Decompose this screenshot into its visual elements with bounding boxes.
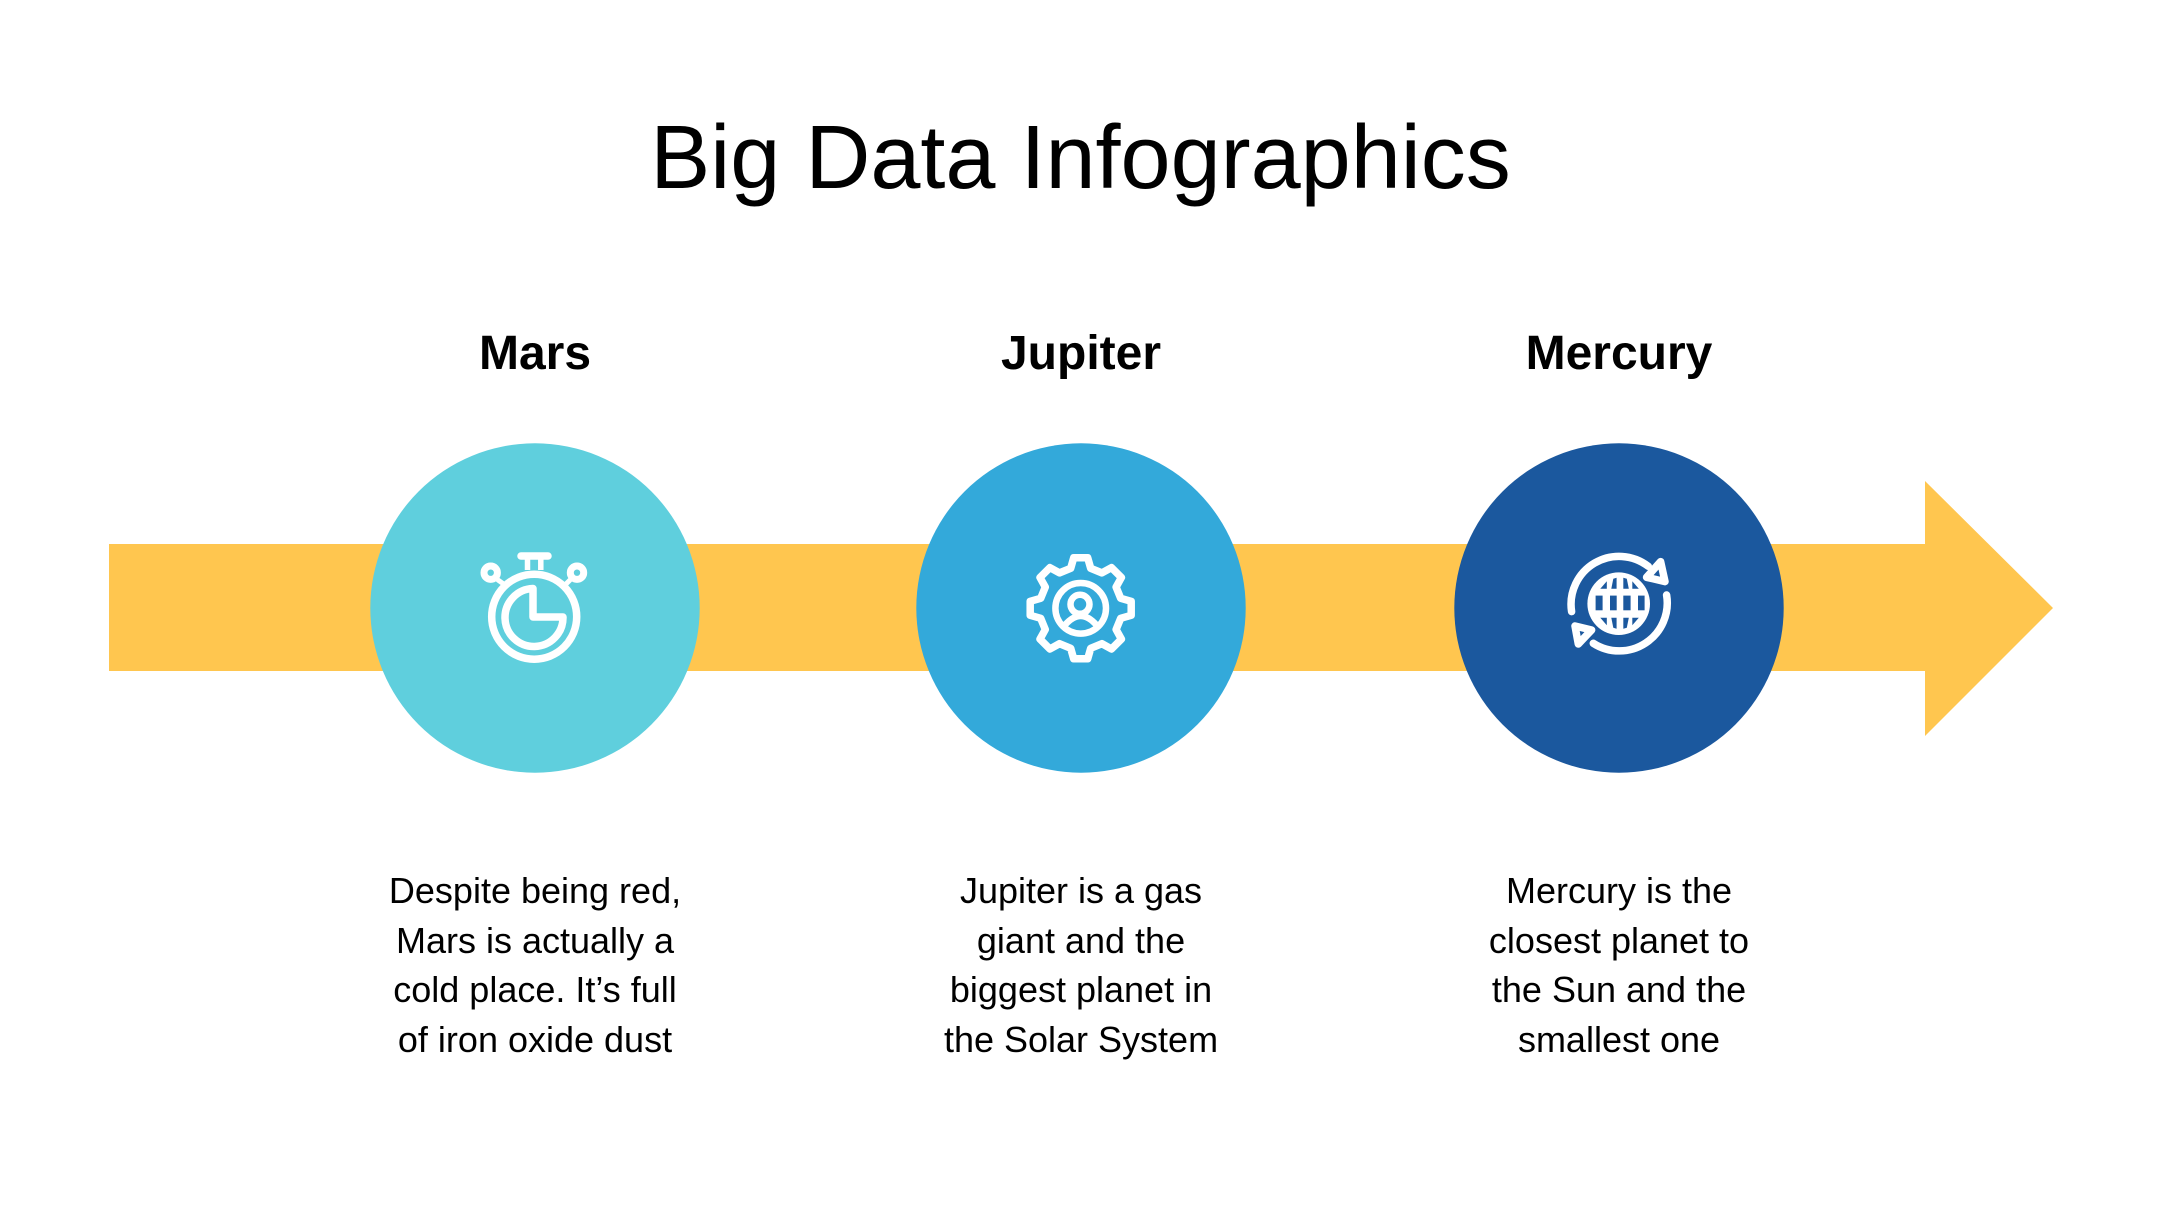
icon: stopwatch xyxy=(484,556,584,659)
text: Mars description: cold place. It’s full xyxy=(393,969,677,1010)
icon: gear with person xyxy=(1030,558,1131,659)
text: Mars description xyxy=(389,870,681,1060)
text: Jupiter description: biggest planet in xyxy=(950,969,1212,1010)
heading: Mars: Mars xyxy=(479,327,591,380)
circle: Jupiter xyxy=(916,443,1246,773)
text: Jupiter description: Jupiter is a gas xyxy=(960,870,1202,911)
heading: Mercury: Mercury xyxy=(1526,327,1712,380)
text: Mars description: of iron oxide dust xyxy=(398,1019,672,1060)
text: Mercury description: smallest one xyxy=(1518,1019,1720,1060)
text: Jupiter description: giant and the xyxy=(977,920,1185,961)
text: Mercury description: Mercury is the xyxy=(1506,870,1732,911)
text: Mars description: Mars is actually a xyxy=(396,920,674,961)
text: Mercury description: closest planet to xyxy=(1489,920,1749,961)
icon: globe with rotating arrows xyxy=(1571,556,1667,651)
title: Big Data Infographics xyxy=(650,108,1511,208)
circle: Mars xyxy=(370,443,700,773)
circle: Mercury xyxy=(1454,443,1784,773)
text: Jupiter description: the Solar System xyxy=(944,1019,1218,1060)
text: Mercury description xyxy=(1489,870,1749,1060)
arrow xyxy=(109,481,2053,736)
text: Mars description: Despite being red, xyxy=(389,870,681,911)
heading: Jupiter: Jupiter xyxy=(1001,327,1161,380)
text: Jupiter description xyxy=(944,870,1218,1060)
text: Mercury description: the Sun and the xyxy=(1492,969,1746,1010)
